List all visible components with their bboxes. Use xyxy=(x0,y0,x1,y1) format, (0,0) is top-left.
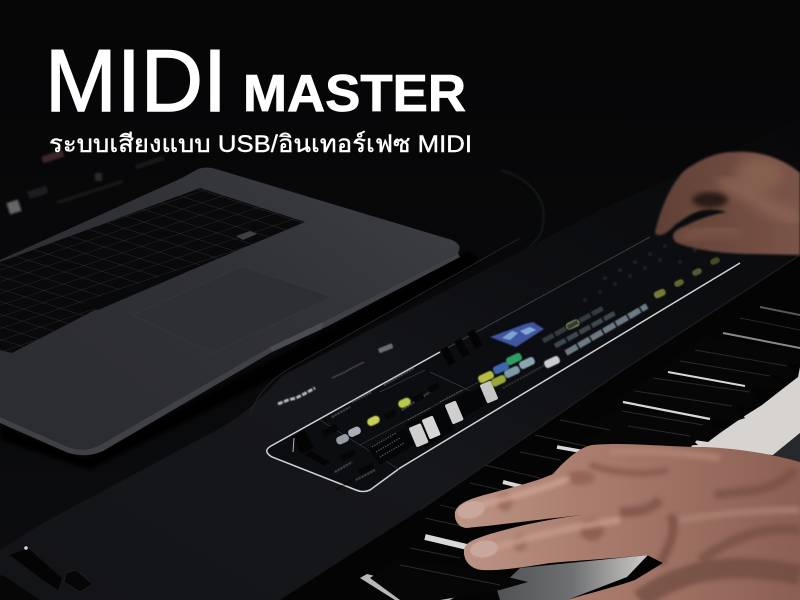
fader highlight xyxy=(293,438,294,452)
black faders xyxy=(292,329,483,466)
control panel white border xyxy=(267,263,740,492)
lit colour buttons xyxy=(366,256,721,427)
lower right hand xyxy=(450,440,800,600)
black key ridge lines xyxy=(400,318,800,585)
black key group xyxy=(370,335,800,600)
laptop xyxy=(0,150,480,470)
panel label marks xyxy=(332,365,545,490)
button rows xyxy=(543,306,647,353)
slider banks xyxy=(368,380,497,465)
small dark panel buttons xyxy=(322,383,440,475)
cable behind laptop xyxy=(420,170,544,318)
white key slivers xyxy=(425,307,800,547)
logos on panel xyxy=(278,343,394,404)
knuckle shadows xyxy=(497,465,800,600)
curved step line xyxy=(250,238,520,415)
white keys right xyxy=(690,367,800,455)
black keys and white keys xyxy=(360,307,800,600)
pitch wheel controls xyxy=(0,546,93,600)
laptop keyboard xyxy=(0,188,305,353)
laptop screen with blurred app interface xyxy=(6,150,165,215)
slider bank ticks xyxy=(372,390,462,457)
space bar xyxy=(82,265,203,310)
laptop shadow xyxy=(0,250,480,470)
instrument top panel xyxy=(0,120,800,600)
subtitle: ระบบเสียงแบบ USB/อินเทอร์เฟซ MIDI xyxy=(49,130,472,158)
panel section dividers xyxy=(320,360,520,470)
finger highlights xyxy=(480,451,800,552)
upper right hand xyxy=(654,150,800,256)
trackpad xyxy=(133,266,332,353)
fingernails xyxy=(455,498,499,559)
key bed xyxy=(280,255,800,600)
control panel outline xyxy=(267,215,760,492)
lit key xyxy=(236,231,257,240)
laptop front edge xyxy=(0,253,460,455)
small grey buttons xyxy=(335,425,362,446)
dark key base right xyxy=(773,433,800,462)
white key lower left xyxy=(360,574,455,600)
title: MASTER: MASTER xyxy=(243,65,466,123)
white keys under hand xyxy=(497,555,648,600)
digital piano xyxy=(0,120,800,600)
upper panel border xyxy=(440,237,650,352)
laptop base xyxy=(0,168,460,450)
dim rotary controls area xyxy=(583,238,727,302)
slider caps xyxy=(409,380,498,447)
title: MIDI: MIDI xyxy=(45,31,227,130)
hinge notch xyxy=(270,322,323,352)
panel front edge highlight xyxy=(420,255,800,510)
display screen xyxy=(490,322,544,347)
